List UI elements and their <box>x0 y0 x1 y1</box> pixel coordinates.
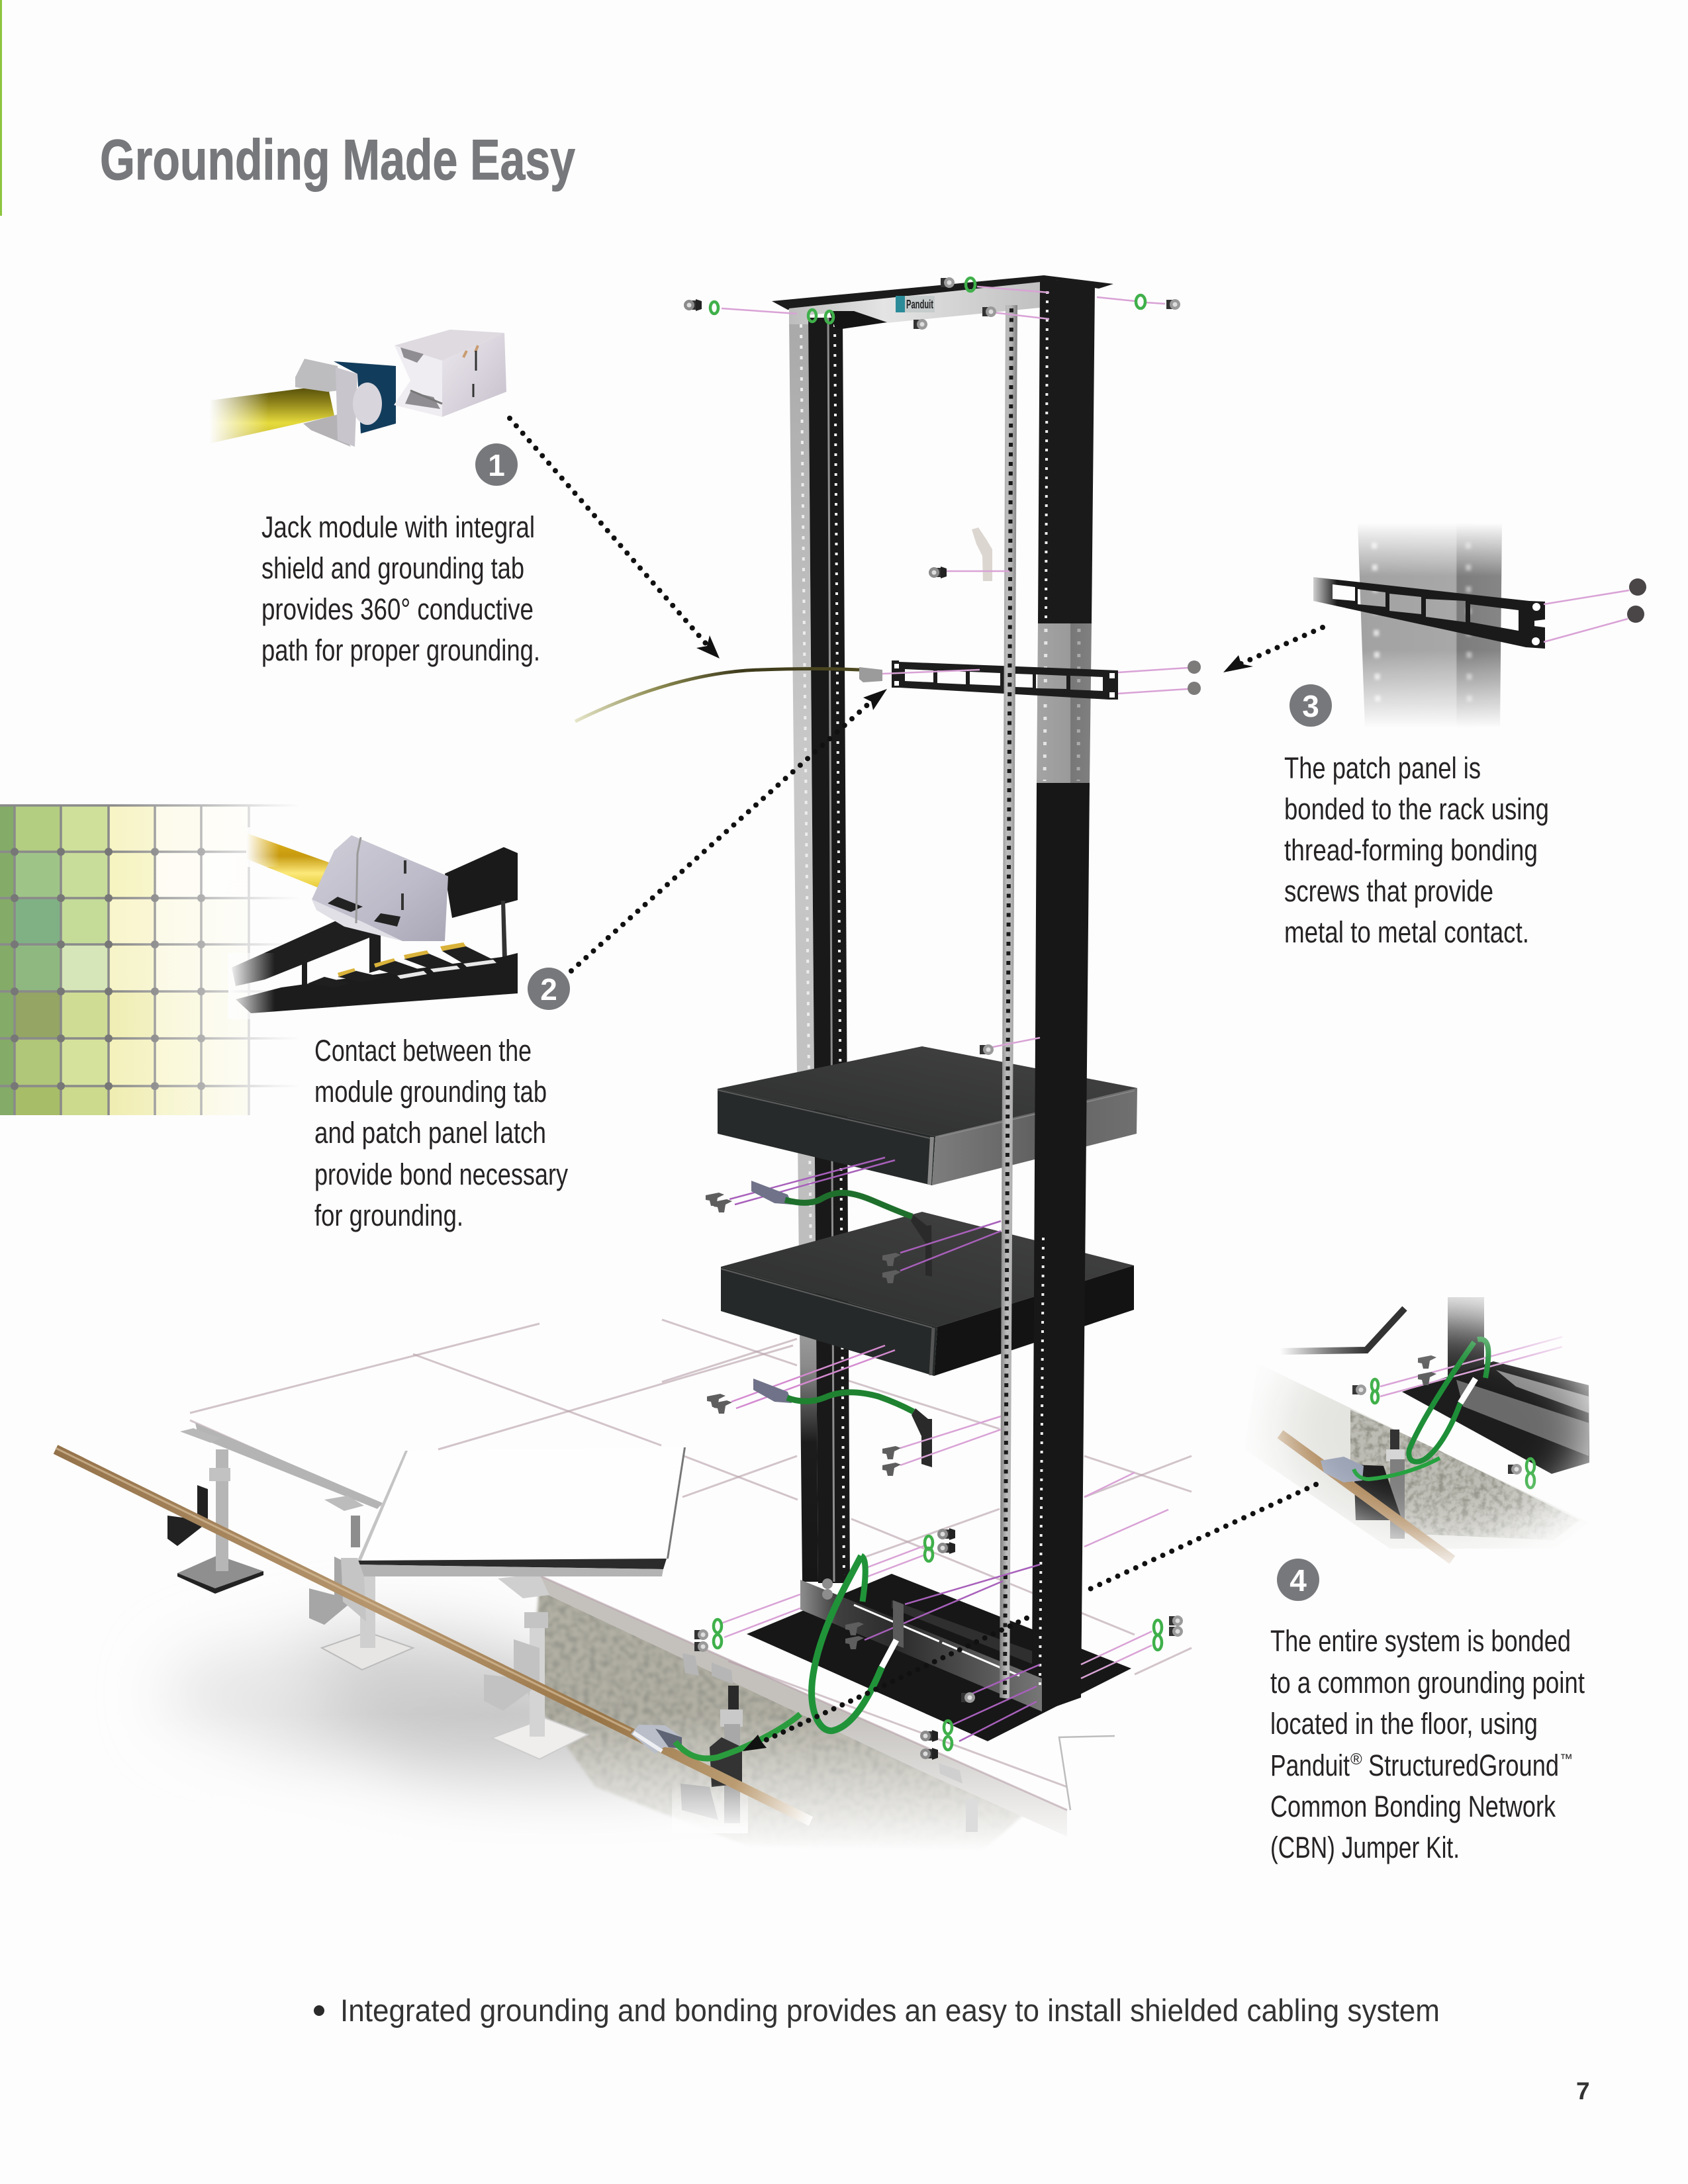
text: callout 1: path for proper grounding. <box>261 633 540 667</box>
left post black upright <box>808 318 850 1583</box>
floor shadow cloud <box>165 1631 761 1810</box>
page number: 7 <box>1576 2077 1590 2105</box>
concrete gravel <box>1350 1410 1579 1540</box>
text: callout 4: to a common grounding point <box>1270 1666 1585 1700</box>
panel: raised floor assembly <box>0 1320 1324 1933</box>
pedestal 3 <box>484 1574 588 1759</box>
panel: vignette 2 module on patch panel <box>228 827 518 1019</box>
jack dome <box>353 383 382 425</box>
badge 2 <box>528 968 570 1010</box>
text: callout 4: located in the floor, using <box>1270 1707 1538 1741</box>
pedestal 4 <box>672 1686 748 1833</box>
panel: equipment rack <box>575 275 1201 1760</box>
silver center strip <box>1000 305 1017 1699</box>
bonding screws closeup <box>1544 590 1629 604</box>
black base plate <box>1402 1361 1589 1474</box>
badge 3 <box>1289 684 1332 727</box>
patch panel with jack and screws <box>882 660 1201 700</box>
shield housing <box>394 330 506 417</box>
jack rear body <box>295 359 339 392</box>
clamp <box>1321 1457 1364 1482</box>
green jumper <box>1409 1342 1474 1462</box>
logo <box>896 296 935 312</box>
pedestal 1 <box>167 1428 263 1594</box>
right post mounting holes <box>1046 291 1047 619</box>
title: Grounding Made Easy <box>100 128 575 192</box>
right post lower black <box>1032 783 1090 1711</box>
pedestal 2 <box>309 1496 413 1670</box>
floor front stringer <box>539 1570 1067 1837</box>
cable manager hook <box>929 527 1009 581</box>
latch teeth <box>308 942 496 987</box>
text: callout 3: screws that provide <box>1284 874 1493 908</box>
panel: vignette 1 jack module <box>209 330 506 450</box>
right post gray section <box>1037 623 1092 783</box>
rack post <box>1448 1297 1484 1380</box>
text: callout 2: for grounding. <box>314 1199 463 1232</box>
badge 2: 2 <box>540 972 557 1007</box>
floor surface <box>190 1324 1192 1810</box>
floor standoffs and ears <box>682 1653 978 1832</box>
badge 1 <box>475 443 518 486</box>
text: callout 1: Jack module with integral <box>261 510 535 544</box>
copper grounding rod <box>56 1448 811 1821</box>
bonding jumper loop at base <box>675 1556 896 1758</box>
green page-edge accent <box>0 0 2 216</box>
text: callout 1: provides 360° conductive <box>261 592 534 626</box>
yellow shielded cable <box>210 385 334 443</box>
text: callout 2: Contact between the <box>314 1034 532 1068</box>
floor grid lines <box>190 1320 1192 1810</box>
rear panel bar <box>445 847 518 918</box>
top cap plate <box>772 275 1113 310</box>
mounting box 2 <box>721 1212 1134 1376</box>
concrete subfloor <box>530 1588 1033 1853</box>
patch panel base band <box>236 953 518 1013</box>
latch supports <box>302 933 381 993</box>
text: callout 2: and patch panel latch <box>314 1116 546 1150</box>
gray rack post with faded ends <box>1358 523 1502 728</box>
logo: Panduit <box>906 298 933 311</box>
mounting box 1 <box>718 1046 1137 1185</box>
arrow: callout 1 to jack <box>510 418 720 659</box>
bottom fade of under-floor scene <box>0 1714 1324 1933</box>
panel: green tile grid background <box>0 797 301 1122</box>
tile corner, vignette 4 <box>1280 1308 1405 1351</box>
bonding jumper 2 <box>707 1345 1001 1476</box>
text: callout 2: provide bond necessary <box>314 1158 568 1191</box>
right post upper black <box>1038 280 1095 623</box>
badge 1: 1 <box>488 448 505 482</box>
patch panel closeup <box>1313 577 1545 649</box>
concrete, pale upper band <box>1267 1377 1566 1549</box>
top hardware <box>684 277 1180 330</box>
panel: vignette 3 patch panel closeup <box>1307 523 1646 728</box>
base hardware <box>694 1473 1183 1760</box>
text: callout 4: Panduit <box>1270 1749 1350 1782</box>
yellow cable <box>247 833 334 890</box>
navy jack core <box>334 361 396 433</box>
text: callout 3: thread-forming bonding <box>1284 833 1538 867</box>
upper bolt <box>980 1038 1040 1055</box>
bonding jumper 1 <box>706 1158 1001 1283</box>
arrow: callout 2 to patch panel <box>571 689 887 971</box>
jack face plate <box>336 367 357 447</box>
text: callout 3: The patch panel is <box>1284 751 1481 785</box>
arrow: callout 3 to patch panel <box>1223 627 1323 672</box>
rings and screws <box>1372 1379 1378 1391</box>
right latch frame post <box>501 901 507 960</box>
text: callout 4: Common Bonding Network <box>1270 1790 1556 1823</box>
badge 3: 3 <box>1302 689 1319 723</box>
lifted floor tile <box>341 1447 686 1621</box>
copper rod <box>1280 1434 1452 1560</box>
text: callout 4 <box>1270 1624 1585 1864</box>
ground clamp <box>631 1725 682 1754</box>
front upper bar <box>232 918 377 986</box>
text: callout 2 <box>314 1034 568 1232</box>
text: callout 1 <box>261 510 540 667</box>
rear crossbar on base <box>800 1580 1042 1711</box>
text: callout 3 <box>1284 751 1549 949</box>
badge 4 <box>1277 1559 1319 1601</box>
silver stringer, back-left <box>195 1423 383 1509</box>
text: callout 4: StructuredGround <box>1368 1749 1559 1782</box>
left post silver flange <box>789 318 818 1582</box>
badge 4: 4 <box>1289 1563 1307 1598</box>
text: callout 1: shield and grounding tab <box>261 551 524 585</box>
text: callout 2: module grounding tab <box>314 1075 547 1109</box>
top silver bracket with logo <box>789 280 1059 329</box>
base plate <box>747 1574 1131 1741</box>
bullet point: Integrated grounding and bonding provides an easy to install shielded cabling system <box>340 1993 1440 2028</box>
text: callout 4: The entire system is bonded <box>1270 1624 1571 1658</box>
text: callout 4: ™ <box>1560 1752 1573 1766</box>
arrow: callout 4 to grounding point <box>743 1484 1316 1751</box>
text: callout 4: ® <box>1350 1751 1362 1768</box>
fiber cable and jack <box>575 667 882 721</box>
pedestal <box>1354 1430 1405 1539</box>
panel: vignette 4 grounding closeup <box>1244 1297 1589 1560</box>
text: callout 3: metal to metal contact. <box>1284 915 1529 949</box>
text: callout 4: (CBN) Jumper Kit. <box>1270 1831 1460 1864</box>
silver module body <box>312 835 448 941</box>
text: callout 3: bonded to the rack using <box>1284 792 1549 826</box>
magenta alignment lines <box>1380 1337 1562 1387</box>
